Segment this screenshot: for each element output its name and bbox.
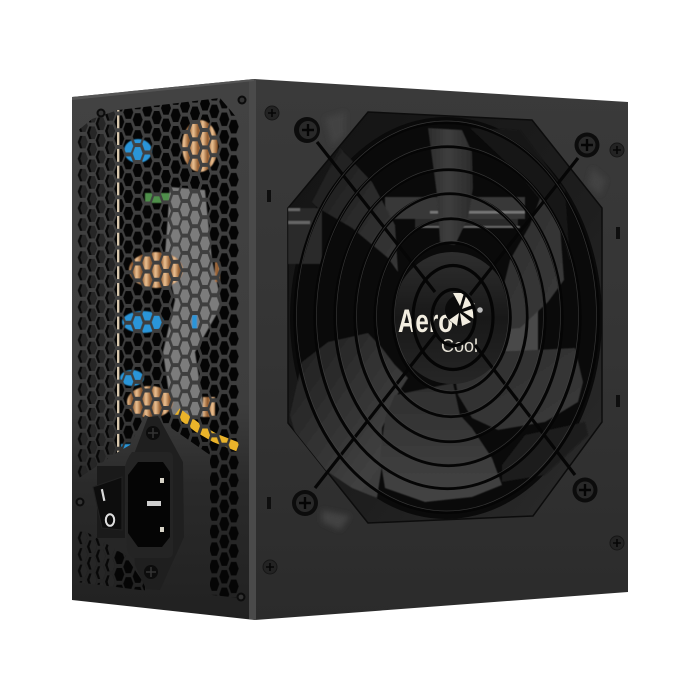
rocker switch <box>93 466 125 538</box>
socket lip <box>124 452 173 558</box>
fan grill <box>295 121 598 512</box>
logo fan icon <box>445 293 475 326</box>
grill spokes <box>315 142 578 488</box>
side panel screws <box>76 96 246 602</box>
power supply illustration <box>72 79 628 620</box>
ventilation honeycomb with internal components <box>78 98 239 598</box>
case slots <box>267 190 620 509</box>
logo text: Cool: Cool <box>441 336 478 356</box>
blade: lower left <box>290 333 408 498</box>
fan opening <box>288 117 602 519</box>
blade: upper right shadow <box>470 128 570 262</box>
blade: upper left <box>312 148 398 272</box>
fan frame <box>288 112 602 523</box>
side panel of the case <box>72 79 256 620</box>
grill screws <box>292 117 600 516</box>
grill ring highlights <box>296 121 596 511</box>
blade: lower right small <box>502 422 588 482</box>
case screws <box>263 106 624 574</box>
socket mounting plate <box>128 416 184 590</box>
blade: right <box>504 198 564 329</box>
logo text: Aero: Aero <box>398 303 453 339</box>
yellow wire <box>177 412 238 447</box>
left shaded vent columns <box>78 112 115 586</box>
fan hub <box>392 252 512 384</box>
grill rings <box>295 122 598 512</box>
fan logo <box>398 293 483 356</box>
power socket assembly <box>124 416 184 590</box>
internal components seen through vents <box>114 98 239 598</box>
socket recess <box>128 462 170 547</box>
fan blades <box>290 128 588 502</box>
socket pins <box>147 478 164 532</box>
blade: bottom centre <box>380 383 502 502</box>
internal parts behind the fan <box>288 197 538 352</box>
front panel of the case <box>254 79 628 620</box>
lighter bevels around the fan frame <box>322 112 606 530</box>
blade: lower right <box>455 348 583 430</box>
socket screws <box>144 426 160 579</box>
blade: top <box>428 128 473 245</box>
logo trademark <box>477 307 483 313</box>
